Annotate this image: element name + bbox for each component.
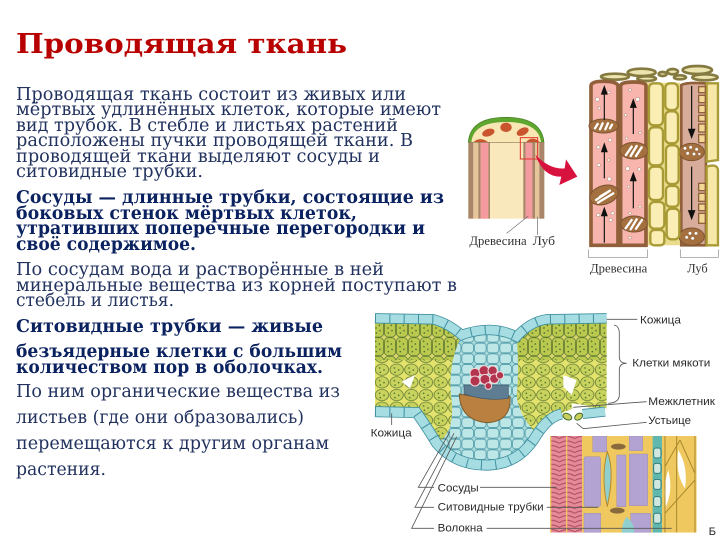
text block: intro: вид трубок. В стебле и листьях растений <box>16 116 398 136</box>
detail labels: Древесина <box>590 261 648 275</box>
text block: sieve tubes function <box>16 382 340 480</box>
leaf labels: Б <box>709 526 716 538</box>
text block: sieve tubes function: По ним органические вещества из <box>16 382 340 402</box>
diagram: stem section and tissue detail <box>468 66 718 275</box>
text block: sieve tubes definition: Ситовидные трубки — живые <box>16 317 323 337</box>
stem longitudinal section <box>468 117 544 219</box>
tissue detail <box>587 66 718 245</box>
text block: intro: расположены пучки проводящей ткани. В <box>16 131 413 151</box>
epidermis <box>375 318 607 465</box>
leaf labels: Волокна <box>438 523 483 535</box>
title: Проводящая ткань <box>16 29 347 60</box>
text block: sieve tubes function: листьев (где они образовались) <box>16 408 304 428</box>
red arrow <box>535 155 577 185</box>
text block: vessels function: минеральные вещества из корней поступают в <box>16 276 457 296</box>
sieve pores <box>699 87 705 223</box>
sieve plates <box>587 119 704 245</box>
leaf labels: Кожица <box>640 315 682 327</box>
stoma guard cells <box>562 412 584 422</box>
flow arrows <box>602 86 695 243</box>
stem labels: Древесина <box>469 234 527 248</box>
tissue inset <box>550 436 697 533</box>
text block: sieve tubes definition <box>16 317 342 378</box>
leaf labels <box>371 315 716 538</box>
text block: sieve tubes function: растения. <box>16 460 106 480</box>
palisade and spongy tissue <box>375 321 607 443</box>
text block: vessels function: стебель и листья. <box>16 291 174 311</box>
stem labels <box>469 216 555 248</box>
text block: vessels definition: своё содержимое. <box>16 235 196 255</box>
leaf labels: Кожица <box>371 428 412 440</box>
vascular bundle <box>459 366 510 423</box>
stem labels: Луб <box>533 234 555 248</box>
text block: sieve tubes definition: безъядерные клетки с большим <box>16 342 342 362</box>
leaf labels: Ситовидные трубки <box>438 502 544 514</box>
leaf labels: Клетки мякоти <box>632 358 710 370</box>
text block: intro: мёртвых удлинённых клеток, которые имеют <box>16 100 441 120</box>
cream cells <box>649 83 718 245</box>
vessel columns <box>591 81 646 245</box>
text block: intro: Проводящая ткань состоит из живых или <box>16 85 406 105</box>
leaf labels: Межклетник <box>648 396 716 408</box>
text block: vessels definition: боковых стенок мёртвых клеток, <box>16 204 357 224</box>
text block: intro: проводящей ткани выделяют сосуды и <box>16 147 380 167</box>
red selection square <box>520 138 538 159</box>
detail labels <box>588 249 718 275</box>
diagram: leaf cross-section <box>371 315 716 538</box>
midrib <box>437 330 535 466</box>
leaf labels: Сосуды <box>438 483 479 495</box>
detail labels: Луб <box>687 261 708 275</box>
text block: vessels function <box>16 260 457 311</box>
text block: vessels definition: Сосуды — длинные трубки, состоящие из <box>16 188 444 208</box>
backing for cream columns <box>647 83 680 245</box>
text block: vessels definition: утративших поперечные перегородки и <box>16 219 425 239</box>
text block: vessels function: По сосудам вода и растворённые в ней <box>16 260 384 280</box>
leaf labels: Устьице <box>648 415 691 427</box>
text block: vessels definition <box>16 188 444 255</box>
text block: sieve tubes function: перемещаются к другим органам <box>16 434 329 454</box>
text block: intro <box>16 85 441 182</box>
text block: sieve tubes definition: количеством пор в оболочках. <box>16 358 323 378</box>
text block: intro: ситовидные трубки. <box>16 162 203 182</box>
